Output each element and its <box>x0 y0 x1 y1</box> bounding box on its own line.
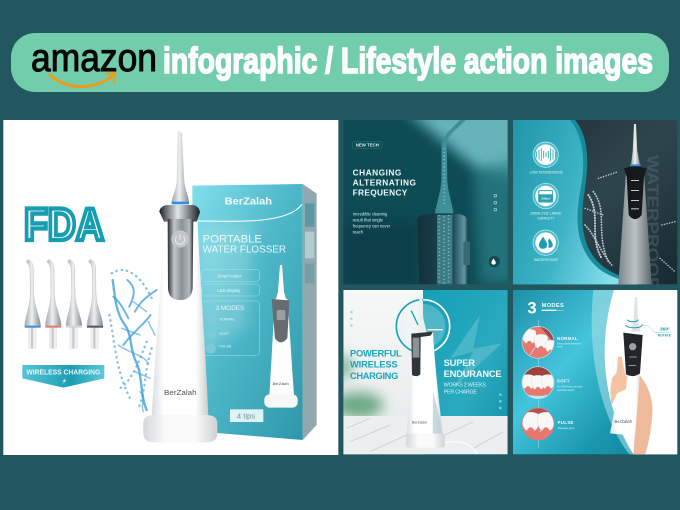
heading <box>353 167 416 197</box>
box title: PORTABLE <box>203 233 262 245</box>
icon: water tank <box>533 183 558 209</box>
new tech tag: NEW TECH <box>356 142 379 147</box>
product box <box>192 184 317 440</box>
capacity label: 200ML/7OZ LARGE <box>530 212 562 216</box>
device brand name: BerZalah <box>164 388 197 397</box>
capacity label <box>530 212 562 221</box>
panel: changing alternating frequency <box>344 120 508 284</box>
heading: CHANGING <box>353 167 401 177</box>
product box: WATER FLOSSER <box>203 245 286 256</box>
mode: normal <box>522 326 582 360</box>
icon: water tank: 200ml <box>541 197 550 201</box>
teal device with water column <box>417 120 470 284</box>
wireless charging heading <box>350 349 402 381</box>
mode: pulse <box>522 408 575 440</box>
panel: 3 modes <box>513 290 677 455</box>
charging base <box>143 415 217 442</box>
rotate callout <box>643 326 672 338</box>
hand holding flosser <box>610 297 652 455</box>
main water flosser <box>143 131 217 442</box>
description: frequency can never <box>353 224 391 229</box>
capacity label: CAPACITY <box>537 217 555 221</box>
big 3 numeral: 3 <box>527 298 537 317</box>
wireless charging heading: CHARGING <box>350 371 398 381</box>
power button <box>171 230 189 248</box>
product box: NORMAL <box>219 317 235 321</box>
lightning bolt <box>450 315 502 388</box>
endurance heading: ENDURANCE <box>444 369 502 379</box>
box device picture <box>264 265 298 408</box>
panel: main product photo <box>3 120 338 455</box>
modes heading: MODES <box>542 303 564 309</box>
product box: 3 MODES <box>216 305 244 312</box>
product box: SOFT <box>219 332 230 336</box>
grey water flosser <box>618 124 652 284</box>
wireless charging heading: POWERFUL <box>350 349 402 359</box>
clock ring <box>396 300 450 353</box>
curved teal sidebar <box>513 120 648 285</box>
amazon logo: amazon <box>31 37 157 80</box>
endurance text <box>444 383 486 396</box>
product box: 4 tips <box>237 412 255 421</box>
icon: waterproof drops <box>533 230 558 255</box>
white flosser <box>406 294 477 454</box>
rotate callout: 360° <box>660 327 670 333</box>
box feature list <box>202 269 259 355</box>
watermark word: WATERPROOF <box>643 155 660 288</box>
water spray <box>585 172 675 272</box>
endurance heading <box>444 358 502 379</box>
wireless charging badge: WIRELESS CHARGING <box>26 368 101 377</box>
product box: PULSE <box>219 344 232 348</box>
new tech tag <box>353 142 382 148</box>
left dots <box>350 311 353 327</box>
marble counter <box>343 416 508 454</box>
wireless charging badge <box>22 365 104 388</box>
product box: Smart motor <box>217 274 242 279</box>
panel: low noise, capacity, waterproof <box>513 120 677 288</box>
water drop button <box>488 256 500 268</box>
box brand name: BerZalah <box>225 196 272 207</box>
mode: normal: Deep clean between <box>557 341 582 345</box>
water splash <box>109 270 157 412</box>
mode: normal: NORMAL <box>557 336 578 341</box>
mode: pulse: Massage gum <box>558 426 575 430</box>
pagination dots <box>494 194 497 211</box>
product box: LED display <box>217 288 241 293</box>
title banner <box>11 33 669 92</box>
vertical connector <box>538 320 539 448</box>
endurance heading: SUPER <box>444 358 475 368</box>
blurred plant <box>333 355 383 418</box>
endurance text: PER CHARGE <box>444 390 477 396</box>
mode: normal: teeth <box>557 345 563 349</box>
box device picture: BerZalah <box>273 381 289 386</box>
heading: FREQUENCY <box>353 187 408 197</box>
mode: pulse: PULSE <box>558 420 574 425</box>
mode: soft: sensitive teeth <box>557 388 575 392</box>
waterproof label: WATERPROOF <box>534 258 558 262</box>
heading: ALTERNATING <box>353 177 416 187</box>
mode: soft <box>521 366 583 399</box>
icon: sound <box>533 142 558 167</box>
description: reach <box>353 230 364 235</box>
endurance text: WORKS 2 WEEKS <box>444 383 486 389</box>
right dots <box>499 393 502 409</box>
description: result that single <box>353 218 384 223</box>
description: Incredible cleaning <box>353 211 388 216</box>
mode: soft: SOFT <box>557 379 570 384</box>
FDA logo: FDA <box>24 199 104 250</box>
rotate callout: ROTATE <box>658 334 672 338</box>
description <box>353 211 391 235</box>
wireless charging heading: WIRELESS <box>350 360 398 370</box>
panel: wireless charging and endurance <box>333 290 508 454</box>
white flosser: BerZalah <box>412 420 427 424</box>
mode: soft: For first-time use and <box>557 385 583 389</box>
low noise label: LOW SOUND/NOISE <box>530 170 564 174</box>
hand holding flosser: BerZalah <box>615 419 633 424</box>
replacement nozzle tips <box>25 260 103 348</box>
